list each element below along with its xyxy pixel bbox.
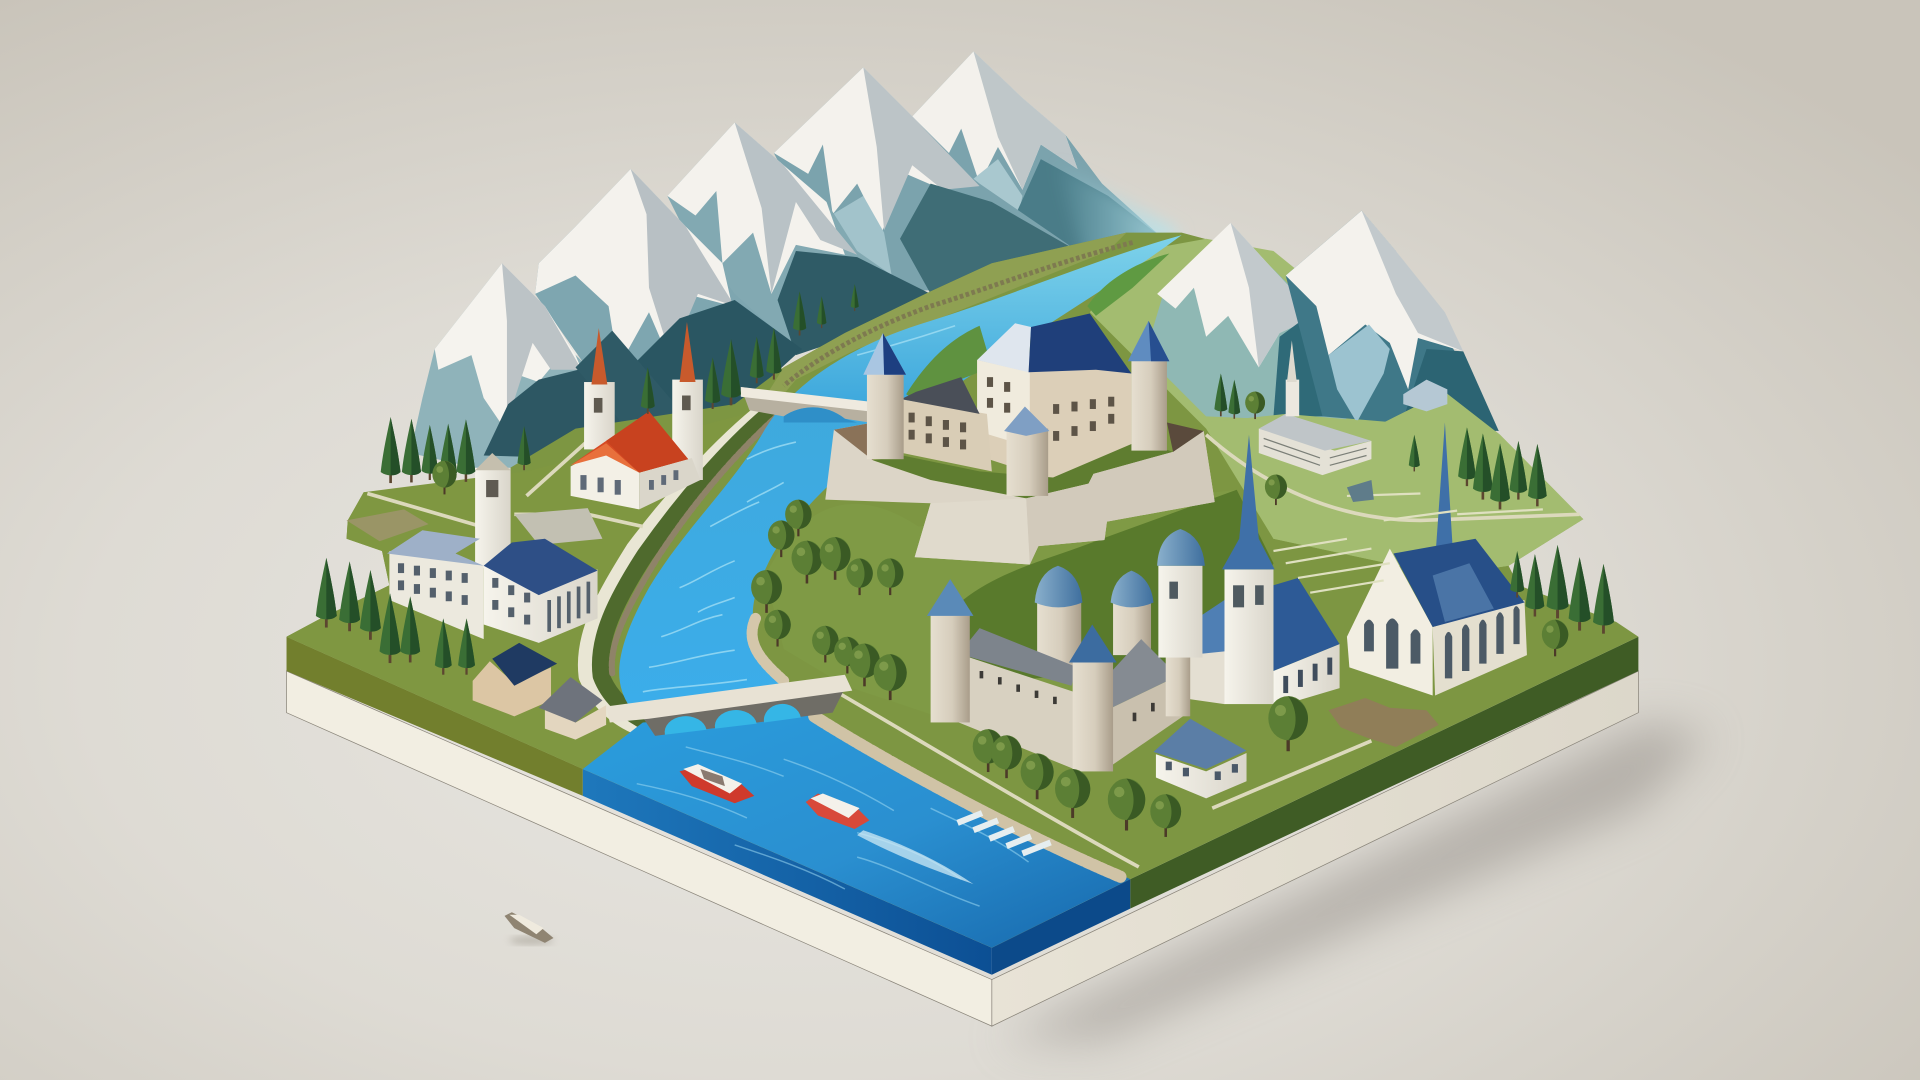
outer curtain wall	[825, 422, 1215, 564]
castle right tower	[1128, 321, 1169, 451]
chapel side wall	[1433, 600, 1527, 696]
mountain 5	[912, 51, 1163, 263]
castle keep left face	[977, 360, 1030, 447]
lower castle roof	[959, 628, 1178, 708]
lower castle dome tower 1	[1035, 566, 1082, 671]
upper castle	[825, 313, 1215, 564]
castle keep roof	[977, 313, 1131, 373]
mountain 6	[1145, 223, 1347, 422]
castle left wing	[901, 377, 1114, 471]
lower castle corner tower	[927, 579, 973, 722]
roads	[367, 435, 1580, 867]
mountains: rear range	[410, 51, 1182, 471]
main church	[1157, 435, 1340, 716]
castle keep walls	[977, 349, 1131, 480]
small peak	[536, 255, 649, 355]
lower lake water	[583, 710, 1130, 948]
ground: left terrace band	[287, 410, 759, 769]
plinth: cream base	[287, 671, 1638, 1026]
left palace	[387, 453, 598, 643]
palace roof	[387, 530, 598, 595]
chapel roof	[1393, 539, 1524, 627]
far white spire	[1286, 340, 1299, 416]
mountain 3	[667, 122, 931, 355]
ground: back meadow strip	[749, 233, 1127, 422]
chapel spire	[1435, 422, 1453, 561]
church nave roof	[1273, 578, 1340, 671]
far pavilion	[1403, 380, 1447, 411]
castle left tower	[863, 333, 906, 459]
right spire tower	[672, 322, 703, 480]
lower castle dome tower 2	[1111, 571, 1153, 655]
upper bridge	[741, 387, 869, 422]
trees: right pines	[1214, 373, 1614, 751]
mountain 1	[410, 263, 686, 471]
small white house	[1153, 719, 1247, 798]
far right field objects	[1329, 480, 1439, 747]
castle courtyard	[873, 441, 1173, 498]
cottages	[473, 643, 606, 740]
river bank: left strip	[589, 410, 784, 725]
trees: centre oaks along river	[751, 500, 907, 700]
chapel gable front	[1347, 549, 1433, 696]
mountain 2	[535, 169, 802, 422]
red-roofed church	[571, 322, 703, 509]
cottage 2	[539, 677, 606, 740]
trees: lower castle front	[973, 729, 1181, 837]
plinth: grass and water side faces	[287, 637, 1638, 975]
mountain 4	[774, 67, 1078, 294]
lower castle wall	[959, 654, 1183, 769]
forest behind upper castle	[906, 253, 1169, 398]
base shadow	[998, 722, 1708, 1041]
far hall building	[1259, 414, 1371, 475]
mountain mist	[1053, 159, 1182, 276]
trees: back left pines	[381, 284, 859, 494]
stray small boat	[504, 912, 553, 944]
hill under castle	[765, 490, 1273, 722]
river upper	[619, 235, 1182, 708]
mountain 7	[1286, 211, 1499, 431]
red roof	[571, 411, 688, 473]
river ripples	[643, 326, 955, 692]
left field objects	[347, 508, 602, 545]
cottage 1	[473, 643, 557, 716]
dome bell tower	[1157, 529, 1205, 658]
lower castle front tower	[1069, 624, 1117, 771]
boat 1	[680, 764, 754, 803]
tall spire tower	[1222, 435, 1275, 704]
ground: main terrain silhouette	[287, 233, 1638, 948]
river far bank	[784, 242, 1133, 386]
mountains: right range	[1145, 211, 1499, 431]
palace tower	[475, 453, 511, 568]
palace body	[389, 551, 598, 643]
river banks: gravel	[752, 618, 1120, 877]
dock	[958, 813, 1051, 853]
church nave	[1273, 644, 1340, 708]
gothic chapel	[1347, 422, 1527, 696]
lower bridge	[606, 675, 852, 736]
left spire tower	[584, 328, 615, 449]
lake ripples	[637, 747, 1029, 906]
church left nave	[1166, 600, 1224, 716]
lower castle	[927, 566, 1183, 771]
church walls	[571, 447, 700, 509]
ground: hill foot below right range	[1206, 392, 1583, 576]
trees: left foreground pines	[316, 558, 475, 675]
ground: upper right light meadow	[1090, 239, 1583, 576]
boat 2 with wake	[806, 793, 973, 884]
terraced fields	[1273, 493, 1543, 593]
castle round tower	[1004, 407, 1049, 496]
